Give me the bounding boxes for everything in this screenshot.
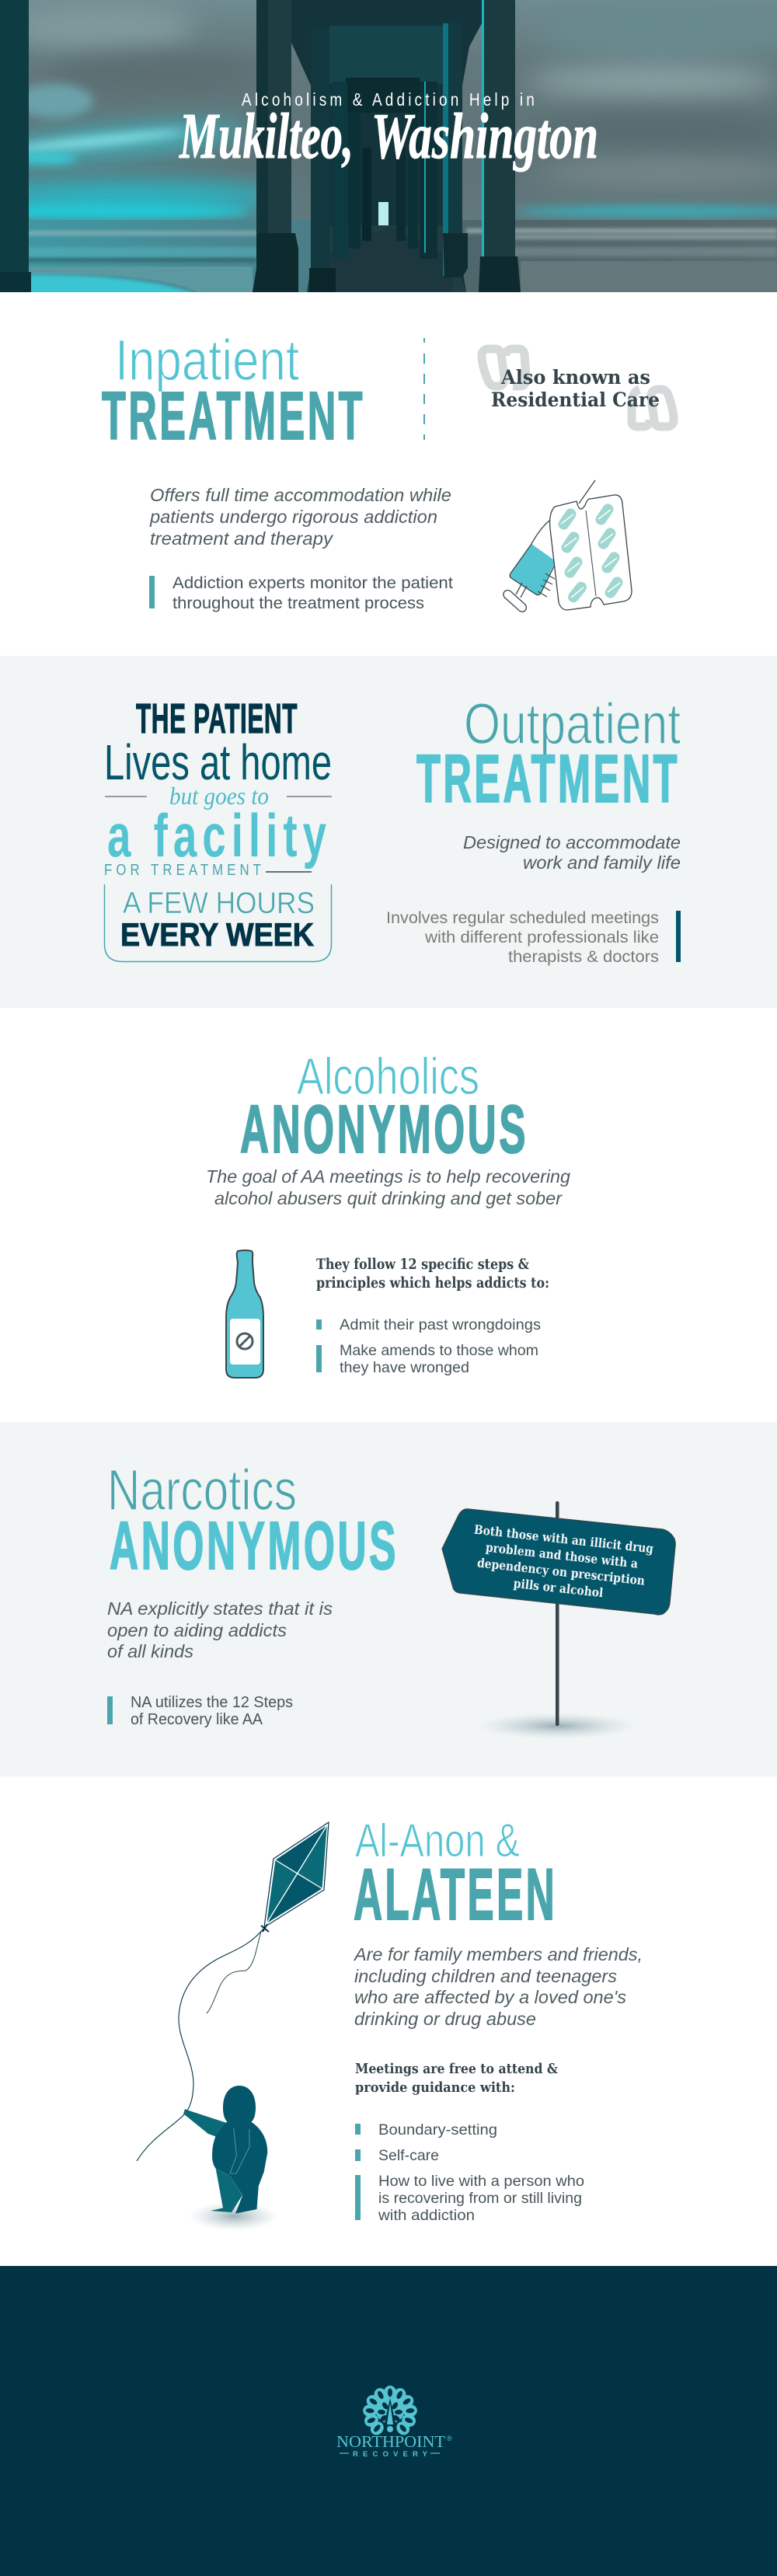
heading: narcotics anonymous: Narcotics bbox=[107, 1458, 297, 1522]
bullet: addiction experts bbox=[149, 574, 453, 612]
description: outpatient bbox=[463, 832, 681, 873]
heading: al-anon and alateen: ALATEEN bbox=[354, 1853, 557, 1935]
panel: footer bbox=[0, 2266, 777, 2576]
bullet: make amends bbox=[316, 1342, 538, 1376]
heading: narcotics anonymous bbox=[107, 1458, 399, 1584]
description: narcotics anonymous: open to aiding addicts bbox=[107, 1620, 287, 1640]
typographic panel: the patient lives at home: FOR TREATMENT bbox=[104, 862, 265, 879]
description: inpatient bbox=[149, 485, 451, 549]
description: outpatient: work and family life bbox=[523, 852, 681, 873]
icon: kite bbox=[261, 1822, 329, 1932]
description: al-anon: including children and teenagers bbox=[354, 1966, 617, 1986]
text: meetings heading: Meetings are free to attend & bbox=[355, 2061, 558, 2077]
heading: alcoholics anonymous: ANONYMOUS bbox=[240, 1092, 528, 1167]
heading: outpatient treatment: Outpatient bbox=[464, 692, 681, 756]
text: meetings heading: provide guidance with: bbox=[355, 2079, 515, 2096]
panel: outpatient treatment bbox=[0, 656, 777, 1008]
callout: also known as residential care bbox=[482, 349, 674, 427]
callout: also known as residential care: Also known as bbox=[500, 366, 650, 389]
icon: bottle with no sign bbox=[226, 1250, 263, 1378]
description: alcoholics anonymous: The goal of AA meetings is to help recovering bbox=[206, 1166, 570, 1187]
heading: alcoholics anonymous bbox=[240, 1047, 528, 1167]
description: narcotics anonymous: NA explicitly states that it is bbox=[107, 1598, 333, 1619]
description: al-anon: Are for family members and friends, bbox=[353, 1944, 643, 1964]
description: alcoholics anonymous bbox=[206, 1166, 570, 1208]
hero photo: pier over the sea bbox=[0, 0, 777, 297]
sign text: Both those with an illicit drug bbox=[473, 1522, 654, 1556]
hero title bbox=[179, 100, 598, 173]
bullet: self-care: Self-care bbox=[378, 2147, 439, 2164]
icon: peacock emblem bbox=[362, 2386, 418, 2438]
bullet: living with a person in recovery: How to live with a person who bbox=[378, 2173, 584, 2190]
heading: alcoholics anonymous: Alcoholics bbox=[297, 1047, 479, 1106]
bullet: scheduled meetings: therapists & doctors bbox=[508, 948, 659, 966]
typographic panel: the patient lives at home: Lives at home bbox=[104, 734, 332, 790]
bullet: make amends: they have wronged bbox=[340, 1359, 469, 1376]
heading: inpatient treatment: Inpatient bbox=[115, 328, 299, 392]
description: inpatient: Offers full time accommodation while bbox=[150, 485, 451, 505]
illustration: sign post bbox=[442, 1501, 675, 1739]
bullet: 12 steps of recovery: NA utilizes the 12 Steps bbox=[131, 1694, 293, 1711]
text: 12 steps heading: principles which helps addicts to: bbox=[316, 1274, 549, 1291]
hero banner bbox=[0, 0, 777, 297]
typographic panel: the patient lives at home: a facility bbox=[107, 801, 332, 870]
heading: inpatient treatment bbox=[102, 328, 365, 454]
bullet: boundary-setting: Boundary-setting bbox=[378, 2121, 497, 2139]
logo: northpoint recovery bbox=[336, 2386, 452, 2459]
hero title: Washington bbox=[371, 100, 598, 173]
heading: inpatient treatment: TREATMENT bbox=[102, 378, 365, 454]
bullet: 12 steps of recovery: of Recovery like AA bbox=[131, 1711, 263, 1728]
panel: inpatient treatment bbox=[0, 292, 777, 656]
bullet: 12 steps of recovery bbox=[107, 1694, 293, 1728]
bullet: scheduled meetings bbox=[386, 909, 681, 966]
bullet: make amends: Make amends to those whom bbox=[340, 1342, 538, 1359]
heading: narcotics anonymous: ANONYMOUS bbox=[110, 1508, 399, 1584]
heading: outpatient treatment bbox=[416, 692, 681, 817]
description: narcotics anonymous: of all kinds bbox=[107, 1641, 194, 1661]
bullet: scheduled meetings: Involves regular scheduled meetings bbox=[386, 909, 659, 927]
person silhouette bbox=[183, 2086, 267, 2214]
sign text: pills or alcohol bbox=[513, 1576, 604, 1600]
description: inpatient: patients undergo rigorous addiction bbox=[149, 507, 437, 527]
text: meetings heading bbox=[355, 2061, 558, 2096]
description: outpatient: Designed to accommodate bbox=[463, 832, 681, 852]
description: al-anon bbox=[353, 1944, 643, 2029]
logo: northpoint recovery: ® bbox=[447, 2435, 452, 2442]
hero title: Mukilteo, bbox=[179, 100, 354, 173]
heading: al-anon and alateen bbox=[354, 1814, 557, 1935]
text: 12 steps heading bbox=[316, 1256, 549, 1291]
bullet: addiction experts: Addiction experts monitor the patient bbox=[172, 574, 453, 592]
panel: alcoholics anonymous bbox=[0, 1008, 777, 1422]
bullet: addiction experts: throughout the treatment process bbox=[172, 594, 424, 612]
bullet: living with a person in recovery: is recovering from or still living bbox=[378, 2190, 582, 2207]
description: inpatient: treatment and therapy bbox=[150, 528, 334, 549]
icon: syringe and blister pack bbox=[502, 480, 632, 614]
heading: al-anon and alateen: Al-Anon & bbox=[355, 1814, 520, 1867]
panel: narcotics anonymous bbox=[0, 1422, 777, 1776]
typographic panel: the patient lives at home bbox=[104, 695, 332, 962]
sign text: problem and those with a bbox=[485, 1540, 639, 1571]
text: 12 steps heading: They follow 12 specific steps & bbox=[316, 1256, 529, 1273]
panel: al-anon and alateen bbox=[0, 1776, 777, 2266]
description: alcoholics anonymous: alcohol abusers quit drinking and get sober bbox=[214, 1188, 563, 1208]
typographic panel: the patient lives at home: THE PATIENT bbox=[136, 695, 298, 742]
bullet: living with a person in recovery bbox=[355, 2173, 584, 2224]
logo: northpoint recovery: RECOVERY bbox=[353, 2450, 428, 2459]
icon: quotation marks bbox=[482, 349, 674, 427]
description: al-anon: who are affected by a loved one's bbox=[354, 1987, 627, 2007]
sign text: dependency on prescription bbox=[476, 1555, 646, 1588]
hero subtitle: Alcoholism & Addiction Help in bbox=[242, 89, 538, 110]
sign text bbox=[473, 1522, 654, 1600]
description: al-anon: drinking or drug abuse bbox=[354, 2009, 536, 2029]
bullet: living with a person in recovery: with addiction bbox=[378, 2207, 475, 2224]
bullet: scheduled meetings: with different professionals like bbox=[424, 929, 659, 946]
typographic panel: the patient lives at home: A FEW HOURS bbox=[123, 887, 315, 920]
description: narcotics anonymous bbox=[107, 1598, 333, 1661]
callout: also known as residential care: Residential Care bbox=[491, 389, 660, 411]
illustration: person flying a kite bbox=[137, 1822, 329, 2231]
bullet: admit wrongdoings: Admit their past wrongdoings bbox=[340, 1316, 541, 1333]
typographic panel: the patient lives at home: but goes to bbox=[169, 782, 269, 810]
typographic panel: the patient lives at home: EVERY WEEK bbox=[120, 916, 314, 953]
logo: northpoint recovery: NORTHPOINT bbox=[336, 2432, 445, 2451]
